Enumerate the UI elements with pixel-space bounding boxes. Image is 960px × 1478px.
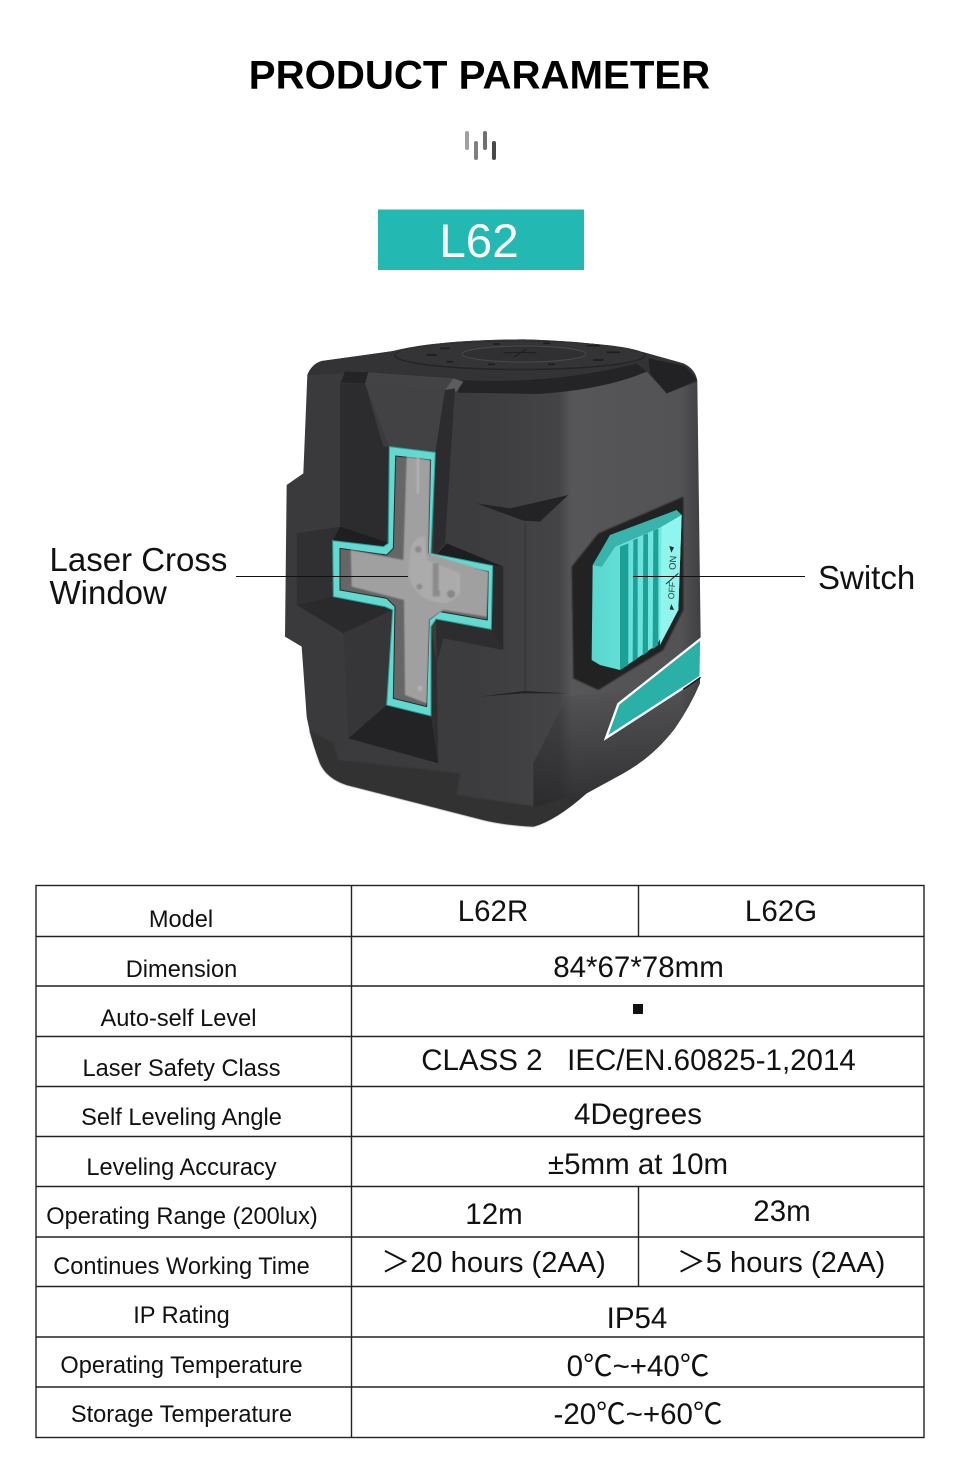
cross window: teal frame xyxy=(333,447,493,716)
row values: 4Degrees xyxy=(574,1098,702,1131)
switch on/off marks: ON xyxy=(667,555,678,570)
title: PRODUCT PARAMETER xyxy=(249,52,710,98)
callout: switch: Switch xyxy=(818,559,915,596)
row values: 84*67*78mm xyxy=(553,951,724,984)
row labels: Operating Temperature xyxy=(60,1353,303,1379)
seam and notches xyxy=(477,495,568,697)
bottom lip xyxy=(309,730,587,827)
switch label panel xyxy=(660,515,682,645)
product illustration: laser level xyxy=(285,339,701,827)
row labels: Leveling Accuracy xyxy=(86,1155,277,1181)
cross window: inner mechanism xyxy=(408,457,460,691)
row labels: Auto-self Level xyxy=(100,1006,257,1032)
row labels: Laser Safety Class xyxy=(82,1056,281,1082)
model badge xyxy=(378,210,584,270)
callout: laser cross window: Window xyxy=(50,574,167,611)
row values: 23m xyxy=(753,1195,811,1228)
corner facets xyxy=(445,378,463,392)
parameter table xyxy=(36,886,924,1438)
dark rim xyxy=(458,363,647,394)
switch face xyxy=(592,515,682,670)
row values: L62G xyxy=(745,895,817,928)
switch recess xyxy=(572,497,683,690)
top cap xyxy=(307,339,697,393)
right top corner xyxy=(648,358,697,393)
row values: CLASS 2 IEC/EN.60825-1,2014 xyxy=(421,1044,856,1077)
row values: 0℃~+40℃ xyxy=(567,1350,709,1383)
callout: laser cross window: Laser Cross xyxy=(50,541,227,578)
row labels: IP Rating xyxy=(133,1303,230,1329)
row values: L62R xyxy=(458,895,528,928)
lower body shade xyxy=(533,683,700,827)
table grid xyxy=(36,886,924,1438)
row labels xyxy=(46,907,318,1428)
switch on/off marks xyxy=(666,546,678,610)
cross recess facets xyxy=(297,383,503,763)
row labels: Dimension xyxy=(126,957,237,983)
cross window: dark inner xyxy=(340,456,488,707)
switch xyxy=(592,510,682,670)
switch on/off marks: OFF xyxy=(666,582,677,599)
teal side stripe xyxy=(606,638,701,738)
switch top edge xyxy=(593,510,682,567)
switch ribs xyxy=(620,529,658,670)
top control dial xyxy=(394,341,646,370)
icon: sound-wave bars xyxy=(465,131,496,160)
row values: ±5mm at 10m xyxy=(548,1148,728,1181)
callout: laser cross window xyxy=(50,541,408,611)
row values: ＞20 hours (2AA) xyxy=(381,1247,606,1279)
row labels: Self Leveling Angle xyxy=(81,1105,282,1131)
row values: 12m xyxy=(465,1198,523,1231)
cross window: grey plate xyxy=(351,457,488,703)
row labels: Continues Working Time xyxy=(53,1254,310,1280)
row labels: Storage Temperature xyxy=(71,1402,292,1428)
row values: IP54 xyxy=(607,1302,667,1335)
row values: ＞5 hours (2AA) xyxy=(677,1247,885,1279)
row values: -20℃~+60℃ xyxy=(554,1398,722,1431)
body silhouette xyxy=(285,339,701,827)
row values xyxy=(381,895,885,1431)
row labels: Model xyxy=(149,907,213,933)
model badge: L62 xyxy=(439,215,519,268)
row labels: Operating Range (200lux) xyxy=(46,1204,318,1230)
